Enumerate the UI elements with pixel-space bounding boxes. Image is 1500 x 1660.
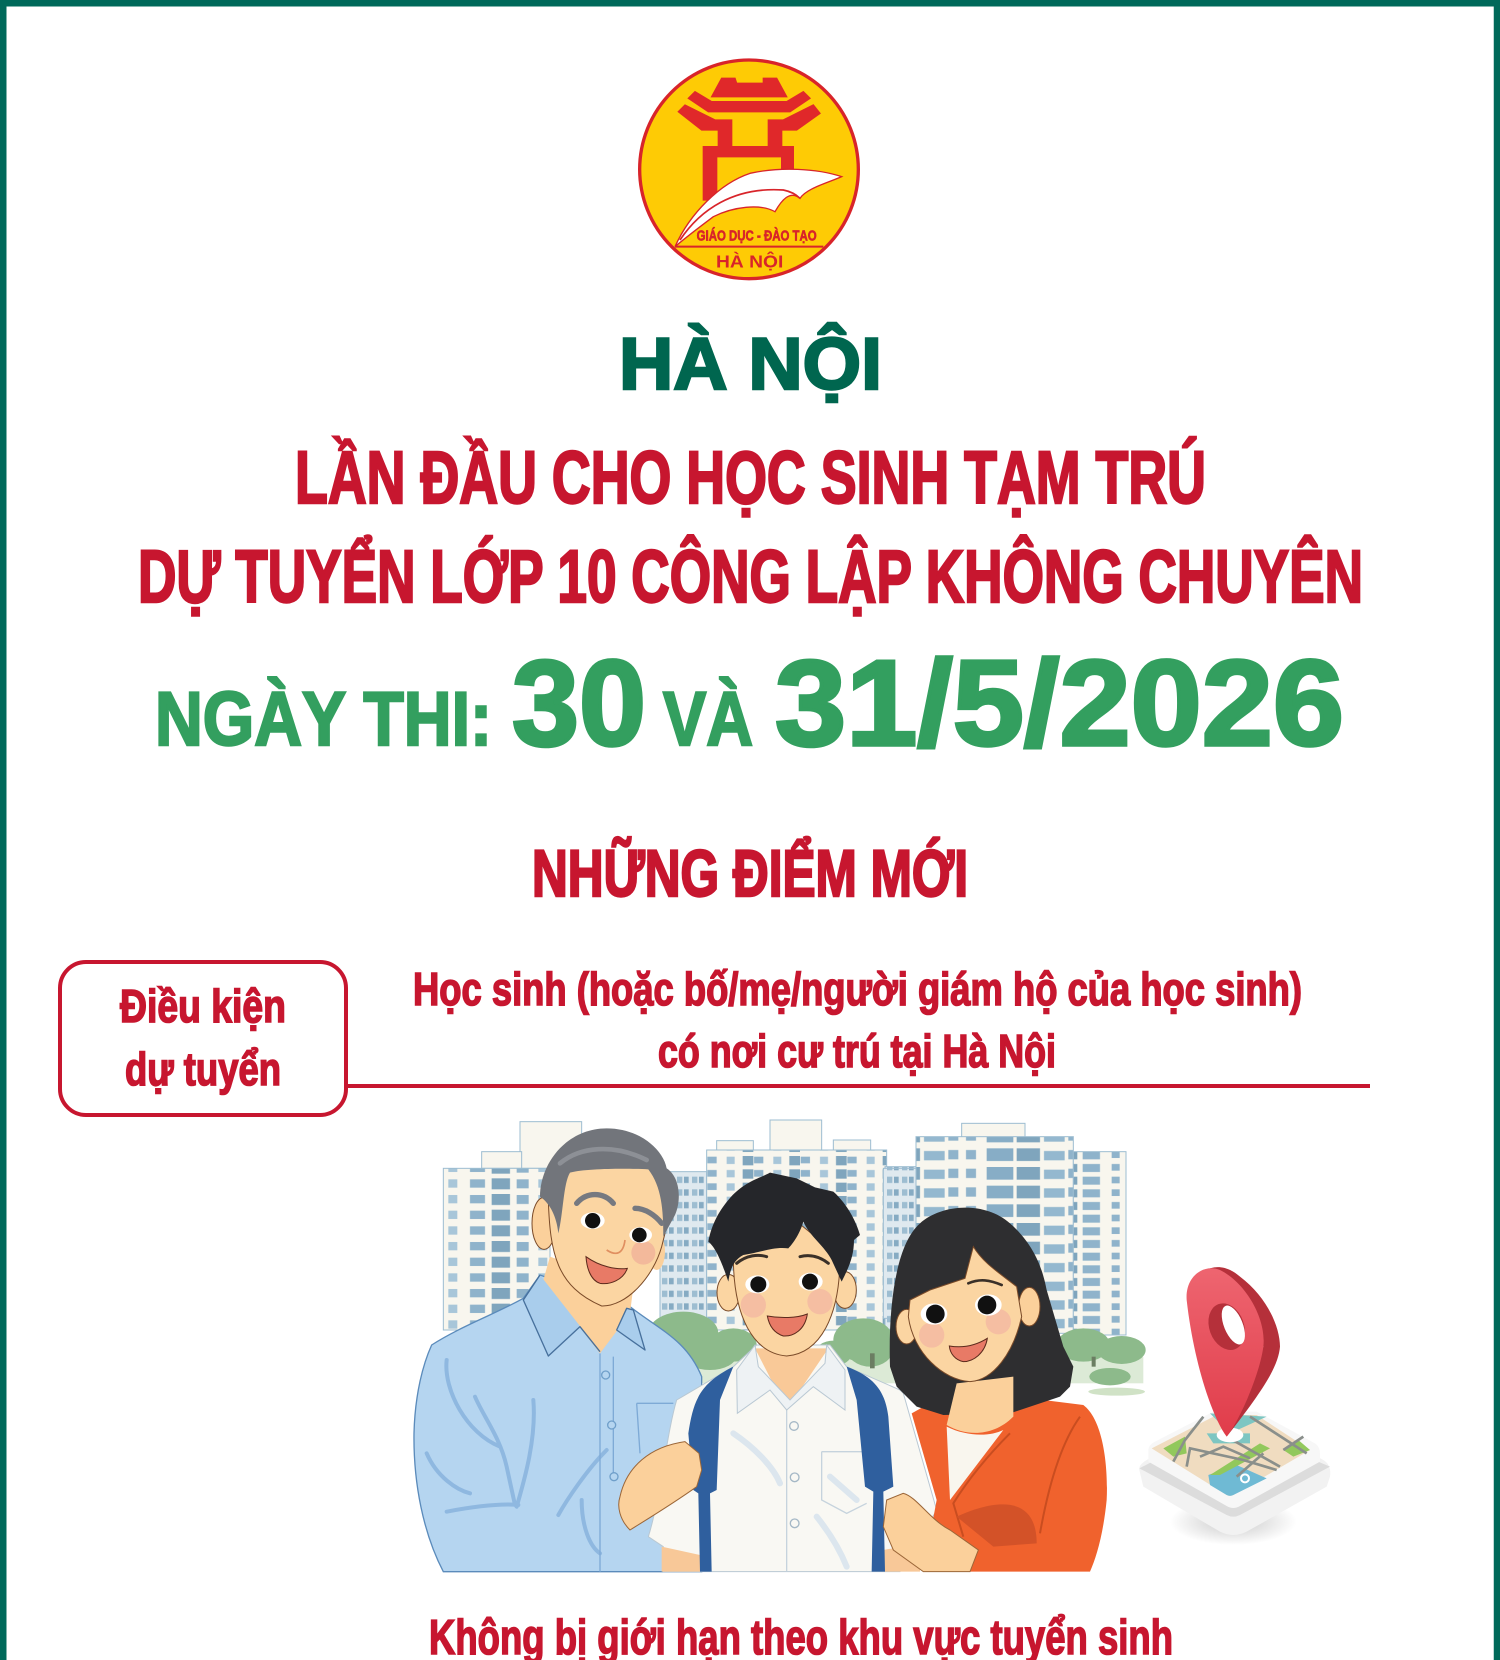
buildings right [883, 1123, 1126, 1335]
map base [1139, 1416, 1330, 1535]
shadow [1170, 1498, 1297, 1545]
boy: shirt [648, 1345, 937, 1572]
rule under eligibility text [346, 1084, 1370, 1088]
exam date: NGÀY THI: [155, 677, 492, 762]
mother: eyes [921, 1303, 947, 1325]
father: eyes [581, 1212, 605, 1229]
map surface [1152, 1415, 1310, 1496]
father: collar [523, 1275, 645, 1356]
boy: ears [717, 1274, 740, 1311]
mother: face [908, 1247, 1022, 1382]
boy: face [733, 1213, 840, 1356]
title: Hà Nội: HÀ NỘI [619, 324, 882, 405]
buildings left and centre [443, 1120, 952, 1330]
eligibility description [413, 963, 1302, 1077]
logo: Hanoi education department emblem [640, 60, 858, 279]
father: mouth [586, 1257, 627, 1284]
icon: map pin on map tile [1139, 1267, 1330, 1545]
mother: mouth [949, 1338, 987, 1362]
exam date: 30 [512, 635, 646, 771]
mother: hand [883, 1493, 978, 1572]
exam date: VÀ [663, 677, 753, 762]
illustration: family with apartment buildings [414, 1120, 1146, 1572]
eligibility description: có nơi cư trú tại Hà Nội [658, 1025, 1056, 1077]
boy: backpack straps [688, 1367, 733, 1572]
logo: Hanoi education department emblem: GIÁO DỤC - ĐÀO TẠO [697, 228, 817, 245]
boy [619, 1173, 937, 1572]
boy: hair [708, 1173, 860, 1282]
father [414, 1128, 702, 1572]
father: face [548, 1167, 665, 1306]
father: ear [532, 1197, 556, 1249]
mother: hair [890, 1208, 1073, 1415]
exam date: 31/5/2026 [775, 635, 1344, 771]
mother: ears [896, 1309, 917, 1344]
father: shirt [414, 1275, 702, 1572]
exam date [155, 635, 1344, 771]
boy: neck and collar [755, 1348, 828, 1410]
father: hair [540, 1128, 679, 1237]
mother: neck and top [947, 1377, 1013, 1433]
mother: jacket [912, 1390, 1107, 1572]
label box: eligibility: Điều kiện [120, 980, 286, 1032]
logo: Hanoi education department emblem: HÀ NỘI [716, 251, 783, 271]
pin [1203, 1267, 1280, 1437]
section heading: new points: NHỮNG ĐIỂM MỚI [532, 836, 968, 910]
father: hand on boy's shoulder [619, 1442, 702, 1530]
label box: eligibility: dự tuyển [125, 1043, 281, 1095]
label box: eligibility [60, 962, 346, 1115]
father: neck [543, 1257, 633, 1353]
mother [883, 1208, 1107, 1572]
boy: mouth [767, 1314, 807, 1336]
boy: eyes [745, 1275, 769, 1293]
boy: arms [662, 1547, 700, 1572]
trees [648, 1312, 1146, 1396]
